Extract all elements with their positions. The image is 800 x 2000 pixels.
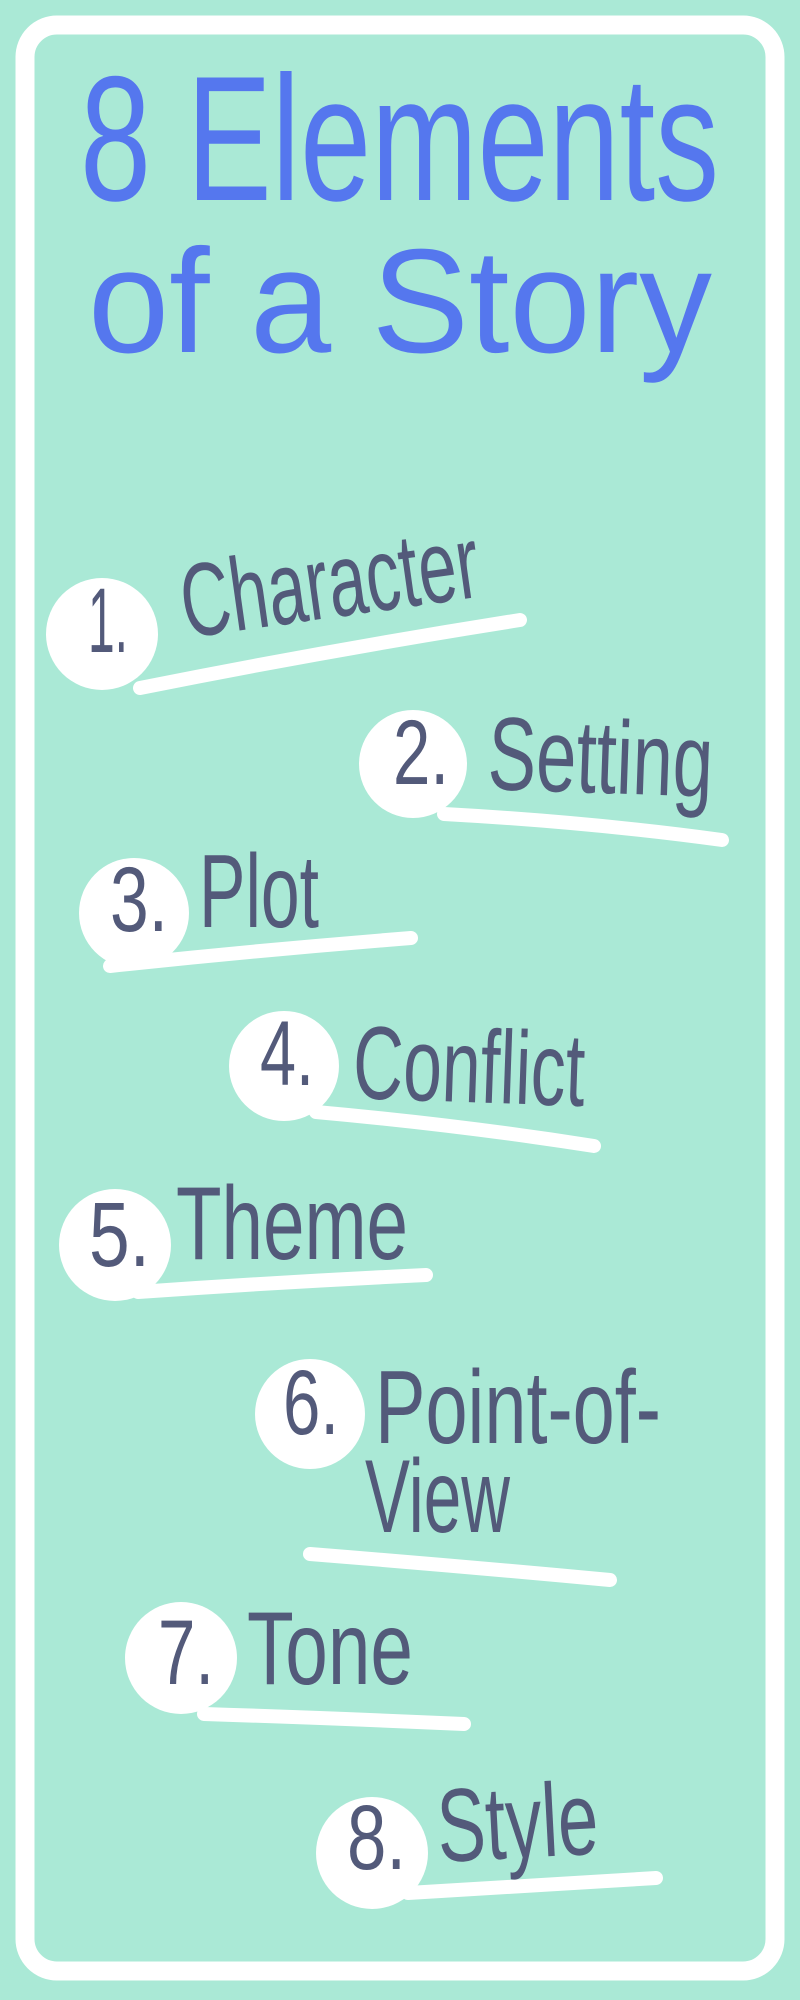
item 4: Conflict: Conflict [351, 1005, 587, 1129]
item 5: Theme: 5. [89, 1184, 150, 1286]
item 1: Character [46, 504, 520, 690]
title: of a Story [88, 219, 712, 384]
item 4: Conflict [229, 1003, 594, 1146]
item 6: Point-of-View: View [365, 1439, 511, 1555]
item 3: Plot: 3. [110, 849, 168, 951]
item 6: Point-of-View [255, 1350, 661, 1580]
item 6: Point-of-View: 6. [283, 1352, 339, 1454]
item 1: Character: 1. [88, 570, 128, 672]
item 7: Tone: 7. [158, 1602, 214, 1704]
item 2: Setting [359, 696, 722, 840]
item 7: Tone [125, 1591, 464, 1724]
item 6: Point-of-View: Point-of- [375, 1350, 661, 1466]
item 7: Tone: Tone [247, 1591, 413, 1707]
title [80, 39, 719, 384]
item 5: Theme: Theme [176, 1166, 408, 1282]
item 4: Conflict: 4. [260, 1003, 314, 1105]
item 8: Style: 8. [347, 1787, 406, 1889]
item 5: Theme [59, 1166, 426, 1301]
item 1: Character: Character [173, 504, 486, 661]
item 2: Setting: 2. [393, 702, 449, 804]
item 8: Style: Style [434, 1761, 601, 1885]
item 8: Style [316, 1761, 656, 1909]
item 3: Plot: Plot [199, 834, 319, 950]
item 3: Plot [79, 834, 411, 968]
